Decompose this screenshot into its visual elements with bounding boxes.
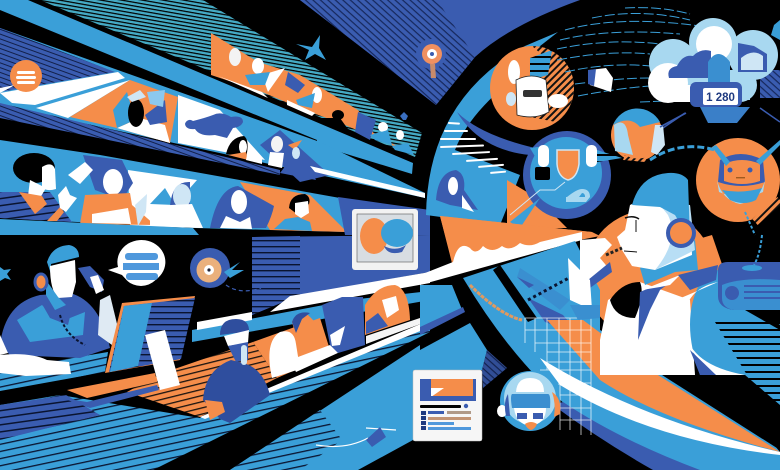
hand bbox=[580, 238, 612, 286]
panel: second row bbox=[0, 28, 425, 198]
person: small woman in crescent bbox=[436, 170, 478, 212]
icon: cloud bbox=[185, 113, 243, 138]
panel: lower blue floor bbox=[230, 285, 507, 470]
icon: stars bbox=[296, 35, 408, 120]
icon: small card bbox=[588, 68, 613, 92]
icon: monitor with speech shapes bbox=[352, 209, 418, 270]
person: top row figures bbox=[229, 48, 414, 155]
panel: top blue band bbox=[0, 0, 413, 174]
panel: megaphone beam bbox=[420, 216, 600, 285]
panel: top stripes with people bbox=[40, 0, 422, 157]
icon: computer monitor bbox=[105, 296, 195, 390]
icon: orange badge bbox=[10, 60, 42, 92]
person: man in orange bbox=[80, 169, 155, 226]
icon: dashed signal arcs bbox=[557, 8, 700, 102]
person: reading figure bbox=[113, 90, 167, 128]
icon: grid overlay bbox=[525, 318, 591, 435]
person: man in orange with book bbox=[253, 297, 365, 378]
person: seated woman bbox=[226, 136, 262, 164]
panel: cloud with robot bbox=[648, 18, 780, 123]
panel: mid dark blue stripes bbox=[192, 197, 430, 342]
person: standing pair bbox=[268, 136, 316, 180]
panel: third row of people bbox=[0, 140, 348, 232]
person: man with black hair bbox=[274, 194, 312, 231]
person: woman with hand raised bbox=[13, 153, 93, 221]
icon: speech bubble bbox=[108, 240, 165, 286]
person: man with blindfold bbox=[203, 319, 270, 423]
icon: small star left bbox=[0, 267, 11, 281]
person: orange woman right bbox=[365, 285, 426, 344]
panel: dark blue wedge top bbox=[300, 0, 580, 105]
icon: dial circle bbox=[190, 248, 261, 291]
shirt bbox=[600, 282, 695, 375]
icon: VR headset circle bbox=[497, 371, 560, 431]
head bbox=[617, 200, 692, 270]
neck bbox=[640, 240, 698, 285]
panel: blue shield circle bbox=[507, 131, 622, 228]
person: agent on the phone bbox=[0, 245, 118, 376]
panel: right stripes bbox=[662, 310, 780, 450]
panel: light blue crescent bbox=[426, 32, 558, 225]
person: woman with hood bbox=[150, 182, 203, 228]
person: man in dark jacket bbox=[210, 186, 274, 229]
panel: desk stripes bottom left bbox=[0, 320, 430, 470]
text: counter: 1 280 bbox=[706, 92, 735, 104]
icon: small dial with key bbox=[416, 39, 446, 78]
headphone bbox=[666, 218, 696, 248]
person: headset operator bbox=[568, 173, 780, 425]
panel: robot circle bbox=[490, 46, 574, 130]
panel: small orange circle bbox=[611, 109, 715, 162]
panel: strip under third row bbox=[0, 219, 199, 235]
panel: orange robot head circle bbox=[696, 138, 780, 235]
icon: desk device bbox=[718, 235, 780, 310]
microphone bbox=[606, 248, 622, 255]
panel: orange circle behind head bbox=[585, 210, 715, 340]
panel: big swooping arcs bbox=[463, 241, 780, 470]
icon: document card bbox=[413, 370, 482, 441]
